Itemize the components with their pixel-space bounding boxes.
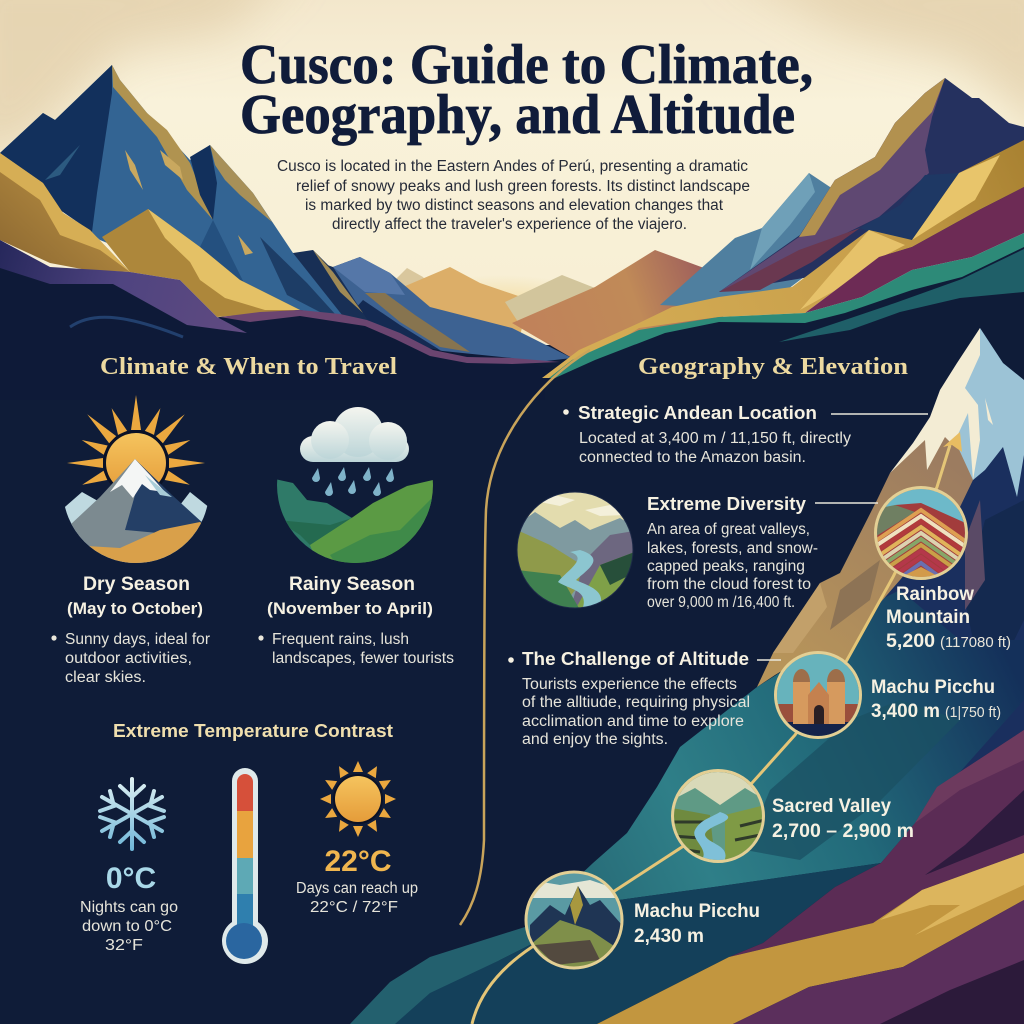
dry season text: clear skies.: [65, 669, 146, 686]
heading: temperature contrast: Extreme Temperature Contrast: [113, 721, 393, 741]
heading: climate: Climate & When to Travel: [100, 354, 397, 380]
dry season text: Dry Season: [83, 574, 190, 595]
rainy season text: Frequent rains, lush: [272, 631, 409, 648]
rainy season text: Rainy Season: [289, 574, 415, 595]
left peak navy face: [0, 65, 112, 232]
cold temperature text: Nights can go: [80, 899, 178, 916]
title: [240, 34, 813, 146]
altitude route line with arrow: [472, 432, 962, 1024]
second peak navy: [190, 145, 217, 220]
icon: diversity valley circle: [516, 492, 634, 608]
icon: snowflake: [100, 779, 164, 849]
cold temperature text: 0°C: [106, 862, 156, 895]
label: lower machu picchu: 2,430 m: [634, 926, 704, 947]
label: rainbow mountain: 5,200: [886, 631, 935, 652]
text block: strategic location: Strategic Andean Location: [578, 403, 817, 423]
dry season text: outdoor activities,: [65, 650, 192, 667]
dark ridge backing: [293, 253, 400, 340]
label: upper machu picchu: (1|750 ft): [945, 704, 1001, 721]
cold temperature text: [80, 862, 178, 954]
title: Cusco: Guide to Climate,: [240, 34, 813, 96]
text block: altitude challenge: The Challenge of Altitude: [522, 649, 749, 669]
snow cream face: [890, 328, 980, 480]
rainy season text: [258, 574, 454, 667]
label: rainbow mountain: Rainbow: [896, 584, 974, 605]
rainy season text: landscapes, fewer tourists: [272, 650, 454, 667]
right green band: [549, 233, 1024, 378]
text block: extreme diversity: lakes, forests, and snow-: [647, 540, 818, 557]
right purple band: [805, 187, 1024, 313]
warm temperature text: [296, 845, 418, 916]
text block: extreme diversity: over 9,000 m /16,400 ft.: [647, 594, 795, 611]
heading: geography: Geography & Elevation: [638, 354, 908, 380]
rainy season text: (November to April): [267, 599, 433, 618]
text block: altitude challenge: and enjoy the sights.: [522, 731, 668, 748]
warm temperature text: 22°C / 72°F: [310, 899, 398, 916]
intro paragraph: is marked by two distinct seasons and elevation changes that: [305, 197, 724, 214]
text block: altitude challenge: [508, 649, 781, 748]
text block: extreme diversity: Extreme Diversity: [647, 494, 806, 514]
purple lower hillside: [733, 900, 1024, 1024]
label: upper machu picchu: 3,400 m: [871, 701, 940, 722]
cold temperature text: down to 0°C: [82, 918, 172, 935]
label: sacred valley: [772, 796, 914, 842]
text block: extreme diversity: An area of great valleys,: [647, 521, 810, 538]
gold hillside: [597, 853, 1024, 1024]
teal slope: [350, 590, 1024, 1024]
left purple ridge: [0, 240, 247, 333]
text block: strategic location: [563, 403, 928, 466]
text block: extreme diversity: capped peaks, ranging: [647, 558, 805, 575]
label: sacred valley: Sacred Valley: [772, 796, 891, 817]
intro paragraph: [277, 158, 750, 233]
icon: thermometer: [222, 768, 268, 964]
title: Geography, and Altitude: [240, 84, 795, 146]
icon: machu picchu circle: [525, 872, 623, 970]
gold decorative divider curve: [460, 350, 590, 925]
intro paragraph: relief of snowy peaks and lush green forests. Its distinct landscape: [296, 178, 750, 195]
snow blue face: [950, 328, 1024, 497]
left gold slope: [0, 153, 130, 272]
right steel blue peak: [660, 173, 880, 310]
text block: altitude challenge: of the alltiude, requiring physical: [522, 694, 750, 711]
brown slope: [757, 420, 973, 687]
dark lower slope: [395, 863, 881, 1024]
right gold band: [542, 140, 1024, 378]
plum corner: [880, 960, 1024, 1024]
illustration: upper Andes mountain range: [0, 65, 1024, 400]
mountain dark right face: [860, 328, 1024, 790]
icon: sacred valley circle: [670, 770, 766, 865]
icon: small sun: [320, 761, 396, 837]
purple hillside: [729, 730, 1024, 957]
icon: rainbow mountain circle: [874, 486, 968, 580]
dry season text: Sunny days, ideal for: [65, 631, 210, 648]
text block: extreme diversity: from the cloud forest to: [647, 576, 811, 593]
cold temperature text: 32°F: [105, 937, 143, 954]
intro paragraph: Cusco is located in the Eastern Andes of Perú, presenting a dramatic: [277, 158, 748, 175]
text block: altitude challenge: acclimation and time to explore: [522, 713, 744, 730]
label: upper machu picchu: [871, 677, 1001, 722]
warm temperature text: 22°C: [324, 845, 392, 878]
right navy peak: [719, 78, 1024, 292]
illustration: lower right altitude mountain: [350, 328, 1024, 1024]
icon: cusco church circle: [775, 650, 861, 742]
second gold slope: [102, 209, 300, 317]
label: upper machu picchu: Machu Picchu: [871, 677, 995, 698]
periwinkle central peak: [333, 257, 572, 364]
distant peaks: [385, 268, 440, 310]
dark third ridge: [293, 250, 378, 335]
icon: rainy season cloud and hills: [277, 407, 433, 563]
warm temperature text: Days can reach up: [296, 880, 418, 897]
label: lower machu picchu: [634, 901, 760, 947]
left peak blue body: [0, 65, 350, 325]
right ground: [545, 245, 1024, 400]
label: rainbow mountain: [886, 584, 1011, 652]
text block: extreme diversity: [647, 494, 878, 611]
dry season text: [51, 574, 210, 686]
label: sacred valley: 2,700 – 2,900 m: [772, 821, 914, 842]
label: rainbow mountain: Mountain: [886, 607, 970, 628]
icon: dry season sun and mountain: [65, 395, 208, 563]
intro paragraph: directly affect the traveler's experience of the viajero.: [332, 216, 687, 233]
text block: strategic location: Located at 3,400 m / 11,150 ft, directly: [579, 430, 851, 447]
dry season text: (May to October): [67, 599, 203, 618]
label: rainbow mountain: (117080 ft): [940, 634, 1011, 651]
right dark teal leaf: [779, 249, 1024, 342]
left peak gold streak: [112, 65, 213, 220]
label: lower machu picchu: Machu Picchu: [634, 901, 760, 922]
text block: strategic location: connected to the Amazon basin.: [579, 449, 806, 466]
left ground: [0, 262, 560, 400]
purple ribbon: [220, 310, 560, 364]
rust peak: [512, 250, 740, 358]
text block: altitude challenge: Tourists experience the effects: [522, 676, 737, 693]
